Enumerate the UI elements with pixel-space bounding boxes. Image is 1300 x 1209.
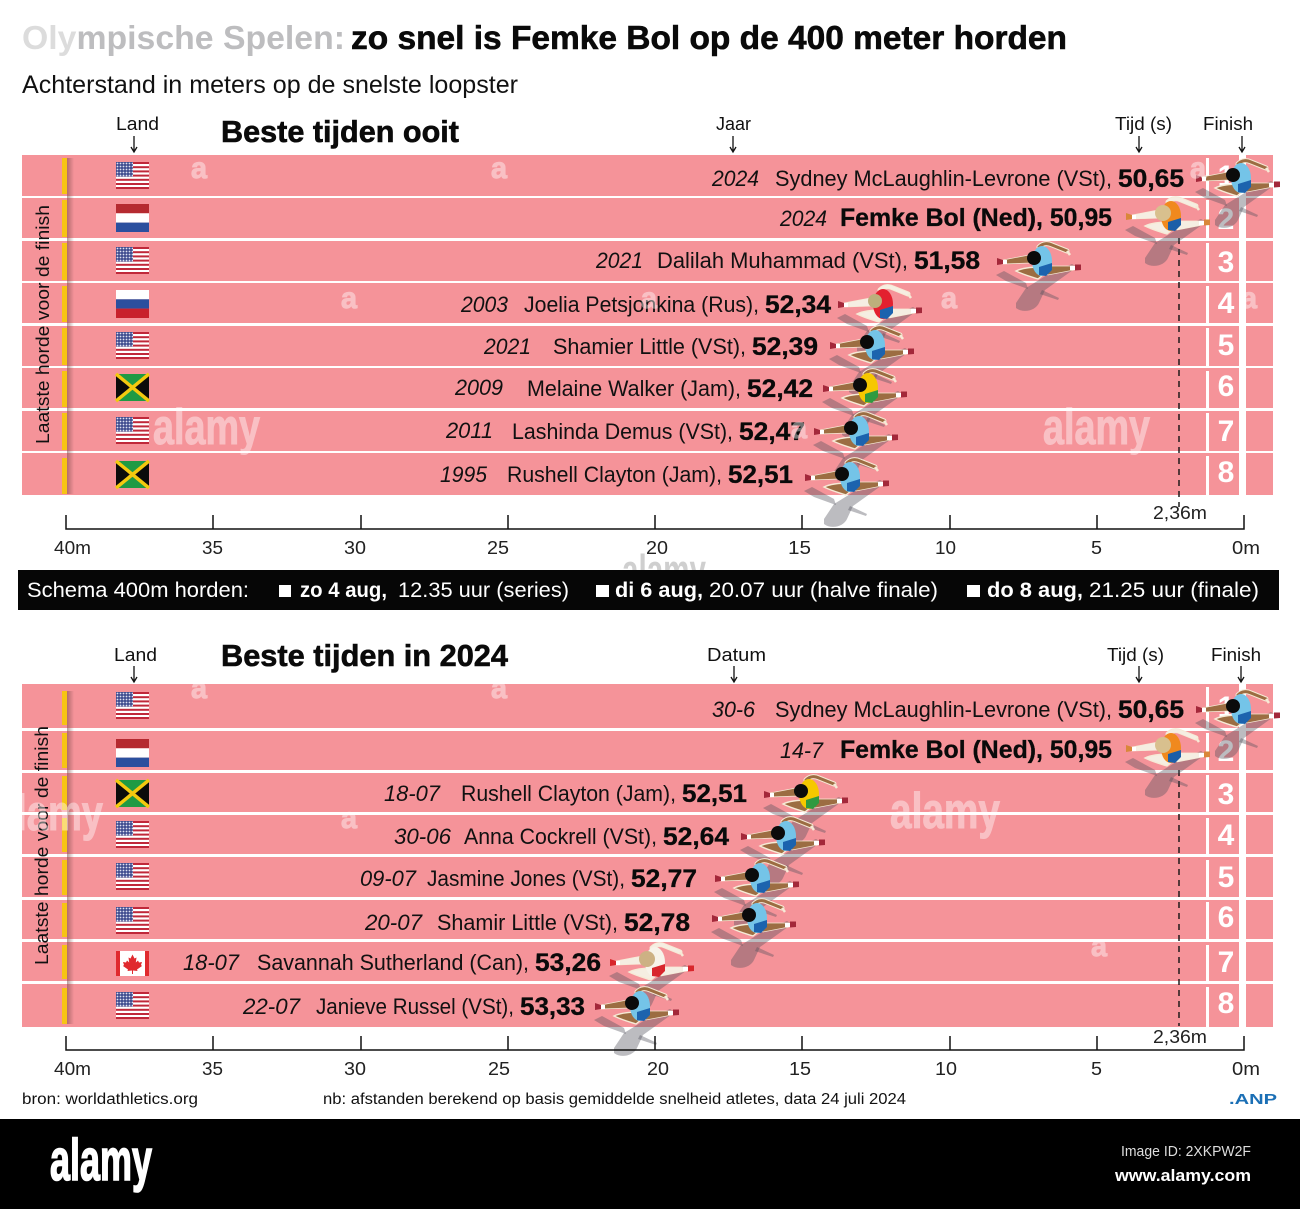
row 3 — [384, 780, 747, 808]
row 4: Joelia Petsjonkina (Rus), — [524, 292, 759, 317]
row 5: 52,77 — [631, 865, 697, 893]
distance axis: 10 — [935, 1059, 957, 1079]
flags — [116, 162, 149, 488]
distance axis: 40m — [54, 538, 91, 558]
lane numbers: 8 — [1218, 987, 1234, 1020]
heading: beste tijden in 2024: Beste tijden in 2024 — [221, 638, 509, 673]
row 6: 2009 — [454, 375, 503, 400]
row 3: Dalilah Muhammad (VSt), — [657, 248, 908, 273]
distance axis — [54, 503, 1260, 558]
lane numbers: 2 — [1218, 203, 1234, 236]
distance axis: 20 — [647, 1059, 669, 1079]
lane numbers: 8 — [1218, 456, 1234, 489]
row 6 — [454, 375, 813, 403]
lane numbers — [1218, 160, 1235, 489]
row 8: 52,51 — [728, 461, 793, 489]
column headers with arrows: Tijd (s) — [1107, 645, 1164, 665]
row 4: 52,34 — [765, 291, 831, 319]
column headers with arrows: Land — [116, 114, 159, 134]
row 7: Savannah Sutherland (Can), — [257, 950, 529, 975]
row 1 — [712, 696, 1184, 724]
distance axis: 2,36m — [1153, 503, 1207, 523]
row 8 — [242, 993, 585, 1021]
watermarks: a — [1091, 930, 1107, 963]
row 8: Rushell Clayton (Jam), — [507, 462, 722, 487]
panel: beste tijden ooit — [22, 114, 1280, 558]
row 8: 22-07 — [242, 994, 301, 1019]
distance axis: 25 — [487, 538, 509, 558]
distance axis: 0m — [1232, 538, 1260, 558]
row 6: Melaine Walker (Jam), — [527, 376, 741, 401]
column headers with arrows: Finish — [1203, 114, 1253, 134]
vertical label: Laatste horde voor de finish — [33, 205, 53, 444]
row 1: Sydney McLaughlin-Levrone (VSt), — [775, 166, 1112, 191]
distance axis: 30 — [344, 538, 366, 558]
distance axis: 20 — [646, 538, 668, 558]
row 3: 2021 — [595, 248, 643, 273]
runners — [594, 692, 1280, 1056]
row 1: Sydney McLaughlin-Levrone (VSt), — [775, 697, 1112, 722]
row 8 — [440, 461, 793, 489]
row 5: 2021 — [483, 334, 531, 359]
subtitle: Achterstand in meters op de snelste loopster — [22, 71, 518, 99]
watermarks: a — [491, 152, 507, 185]
row 6: 52,42 — [747, 375, 813, 403]
website: www.alamy.com — [1114, 1166, 1251, 1185]
watermarks: a — [1190, 152, 1206, 185]
row 5: 09-07 — [360, 866, 417, 891]
watermarks: a — [941, 282, 957, 315]
source note: bron: worldathletics.org — [22, 1091, 198, 1108]
row 8: 53,33 — [520, 993, 585, 1021]
lane numbers: 3 — [1218, 778, 1234, 811]
row 7 — [183, 949, 601, 977]
row 6: Shamir Little (VSt), — [437, 910, 618, 935]
row 2: Femke Bol (Ned), 50,95 — [840, 204, 1112, 232]
distance axis: 30 — [344, 1059, 366, 1079]
row 5 — [360, 865, 697, 893]
row 1: 30-6 — [712, 697, 756, 722]
row 5: 52,39 — [752, 333, 818, 361]
row 4: 30-06 — [394, 824, 452, 849]
image id: Image ID: 2XKPW2F — [1121, 1143, 1251, 1160]
column headers with arrows: Tijd (s) — [1115, 114, 1172, 134]
schedule bar: Schema 400m horden: — [27, 579, 249, 602]
watermarks: a — [191, 152, 207, 185]
lane numbers: 4 — [1218, 287, 1235, 320]
watermarks: a — [1241, 282, 1257, 315]
distance axis: 5 — [1091, 538, 1102, 558]
row 7: 52,47 — [739, 418, 805, 446]
distance axis — [54, 1027, 1260, 1079]
column headers with arrows — [114, 645, 1261, 682]
heading: beste tijden ooit: Beste tijden ooit — [221, 114, 459, 149]
row 7: Lashinda Demus (VSt), — [512, 419, 733, 444]
distance axis: 35 — [202, 538, 223, 558]
row 2: 2024 — [779, 206, 827, 231]
distance axis: 15 — [789, 1059, 811, 1079]
row 5 — [483, 333, 818, 361]
lane numbers: 2 — [1218, 735, 1234, 768]
watermarks: alamy — [153, 399, 260, 455]
row 6 — [364, 909, 690, 937]
lane numbers: 6 — [1218, 901, 1234, 934]
lane numbers: 1 — [1218, 160, 1234, 193]
row 3: 18-07 — [384, 781, 441, 806]
title: zo snel is Femke Bol op de 400 meter horden — [351, 19, 1067, 56]
lane numbers: 4 — [1218, 819, 1235, 852]
schedule bar — [18, 570, 1279, 610]
watermarks: alamy — [1043, 399, 1150, 455]
methodology note: nb: afstanden berekend op basis gemiddelde snelheid atletes, data 24 juli 2024 — [323, 1091, 906, 1108]
lane numbers: 3 — [1218, 246, 1234, 279]
distance axis: 15 — [788, 538, 811, 558]
panel: beste tijden in 2024 — [22, 638, 1280, 1079]
distance axis: 40m — [54, 1059, 91, 1079]
title: Olympische Spelen: — [22, 19, 345, 56]
lane numbers: 5 — [1218, 861, 1234, 894]
row 4: 52,64 — [663, 823, 729, 851]
distance axis: 25 — [488, 1059, 510, 1079]
row 6: 20-07 — [364, 910, 423, 935]
row 3 — [595, 247, 980, 275]
row 3: 51,58 — [914, 247, 980, 275]
ANP logo: .ANP — [1229, 1091, 1277, 1108]
lane numbers: 1 — [1218, 691, 1234, 724]
row 5: Shamier Little (VSt), — [553, 334, 746, 359]
vertical label: Laatste horde voor de finish — [32, 726, 52, 965]
row 5: Jasmine Jones (VSt), — [427, 866, 625, 891]
distance axis: 35 — [202, 1059, 223, 1079]
title — [22, 19, 1067, 56]
distance axis: 0m — [1232, 1059, 1260, 1079]
distance axis: 5 — [1091, 1059, 1102, 1079]
distance axis: 10 — [935, 538, 956, 558]
dashed distance line — [1178, 238, 1180, 507]
row 1: 2024 — [711, 166, 759, 191]
column headers with arrows: Jaar — [716, 114, 751, 134]
distance axis: 2,36m — [1153, 1027, 1207, 1047]
row 1: 50,65 — [1118, 696, 1184, 724]
schedule bar: do 8 aug, — [987, 579, 1083, 602]
row 4 — [394, 823, 729, 851]
row 7: 18-07 — [183, 950, 240, 975]
row 4 — [460, 291, 831, 319]
column headers with arrows: Datum — [707, 645, 766, 665]
lane numbers: 6 — [1218, 370, 1234, 403]
schedule bar: di 6 aug, — [615, 579, 703, 602]
track lanes — [22, 684, 1273, 1027]
watermarks — [0, 152, 1257, 963]
row 6: 52,78 — [624, 909, 690, 937]
row 3: 52,51 — [682, 780, 747, 808]
row 1 — [711, 165, 1184, 193]
flags — [116, 692, 149, 1019]
row 8: Janieve Russel (VSt), — [316, 994, 514, 1019]
column headers with arrows: Land — [114, 645, 157, 665]
row 3: Rushell Clayton (Jam), — [461, 781, 676, 806]
watermarks: a — [791, 412, 807, 445]
row 7: 53,26 — [535, 949, 601, 977]
watermarks: a — [491, 672, 507, 705]
footer band — [0, 1119, 1300, 1209]
schedule bar: 21.25 uur (finale) — [1089, 579, 1259, 602]
track lanes — [22, 155, 1273, 495]
row 2: Femke Bol (Ned), 50,95 — [840, 736, 1112, 764]
schedule bar: zo 4 aug, — [300, 579, 387, 602]
row 7: 2011 — [445, 418, 493, 443]
lane numbers: 5 — [1218, 329, 1234, 362]
schedule bar: 20.07 uur (halve finale) — [709, 579, 938, 602]
row 7 — [445, 418, 805, 446]
row 4: 2003 — [460, 292, 509, 317]
watermarks: a — [641, 282, 657, 315]
watermarks: a — [191, 672, 207, 705]
lane numbers: 7 — [1218, 415, 1234, 448]
lane numbers — [1218, 691, 1235, 1020]
row 4: Anna Cockrell (VSt), — [464, 824, 657, 849]
watermarks: a — [341, 802, 357, 835]
lane numbers: 7 — [1218, 946, 1234, 979]
alamy logo: alamy — [50, 1128, 152, 1193]
runners — [804, 161, 1280, 527]
dashed distance line — [1178, 770, 1180, 1026]
watermarks: a — [341, 282, 357, 315]
schedule bar: 12.35 uur (series) — [398, 579, 569, 602]
column headers with arrows — [116, 114, 1253, 152]
faint watermark above schedule bar: alamy — [622, 546, 706, 595]
row 1: 50,65 — [1118, 165, 1184, 193]
row 2: 14-7 — [780, 738, 824, 763]
watermarks: alamy — [890, 783, 1000, 839]
column headers with arrows: Finish — [1211, 645, 1261, 665]
row 8: 1995 — [440, 462, 488, 487]
